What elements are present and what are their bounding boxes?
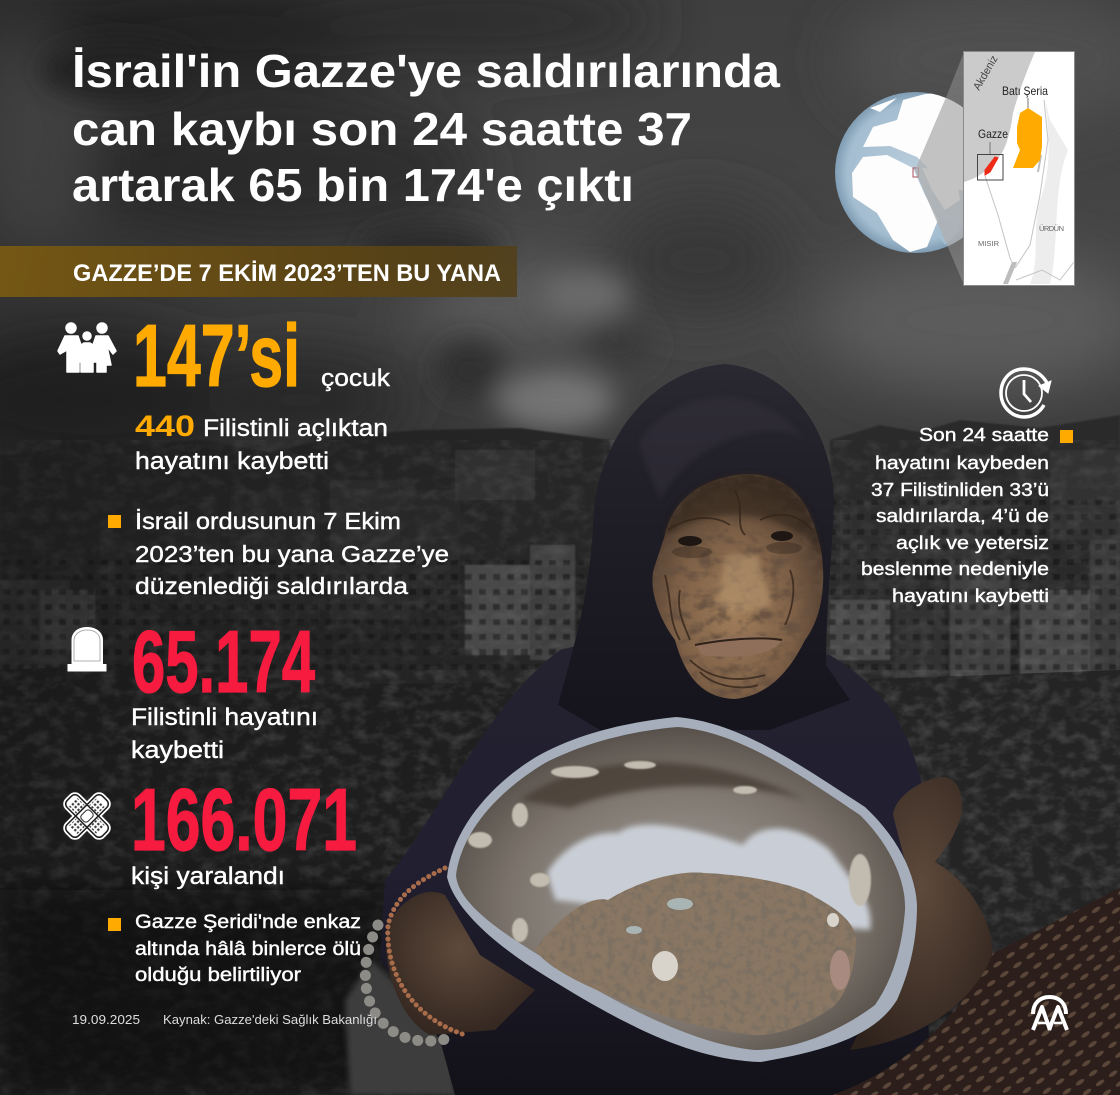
pink fragment	[830, 950, 850, 990]
logo: AA	[1033, 997, 1067, 1030]
icon: gravestone	[68, 627, 106, 672]
bowl	[447, 717, 917, 1062]
map panel	[964, 52, 1074, 286]
woman holding an empty bowl	[380, 364, 930, 1095]
stat: hunger deaths: 440	[135, 410, 195, 443]
text: last 24 hours: açlık ve yetersiz	[896, 532, 1049, 553]
title	[72, 45, 780, 211]
stat: children: 147’si	[133, 306, 300, 405]
text: under the rubble: altında hâlâ binlerce ölü	[135, 939, 361, 960]
title: İsrail'in Gazze'ye saldırılarında	[72, 45, 780, 97]
footer: date and source	[72, 1013, 377, 1027]
Gaza marker box	[978, 154, 1003, 180]
Gaza Strip	[985, 157, 998, 175]
banner	[0, 246, 517, 297]
text: under the rubble: Gazze Şeridi'nde enkaz	[135, 912, 361, 933]
stat: deaths: 65.174	[132, 612, 315, 711]
icon: clock with arrow	[1001, 369, 1051, 417]
terrain	[1030, 100, 1068, 284]
label: Gaza: Gazze	[978, 127, 1008, 141]
prayer beads	[365, 925, 450, 1041]
mouth	[695, 635, 782, 657]
text: attacks since 7 October: 2023’ten bu yana Gazze’ye	[135, 541, 449, 567]
map inset with globe	[835, 50, 1074, 290]
text: attacks since 7 October: İsrail ordusunun 7 Ekim	[135, 508, 401, 534]
foil and white residue	[547, 825, 871, 930]
text: attacks since 7 October	[108, 508, 449, 599]
text: under the rubble: olduğu belirtiliyor	[135, 965, 302, 986]
text: last 24 hours: saldırılarda, 4’ü de	[876, 505, 1049, 526]
hands and bowl	[365, 717, 992, 1062]
title: can kaybı son 24 saatte 37	[72, 103, 692, 155]
left hand	[386, 892, 535, 1035]
label: West Bank: Batı Şeria	[1002, 84, 1048, 98]
banner: GAZZE’DE 7 EKİM 2023’TEN BU YANA	[73, 260, 501, 287]
Gaza label leader	[989, 142, 991, 154]
face wrinkles	[652, 474, 823, 699]
stat: hunger deaths: hayatını kaybetti	[135, 448, 329, 475]
text: last 24 hours: hayatını kaybeden	[875, 452, 1049, 473]
text: under the rubble	[108, 912, 361, 986]
label: Egypt: MISIR	[978, 239, 1000, 248]
stat: wounded: 166.071	[131, 770, 357, 869]
stat: deaths: kaybetti	[131, 737, 224, 764]
stat: hunger deaths	[135, 410, 388, 475]
deep wrinkle lines	[665, 490, 812, 687]
face	[652, 474, 823, 699]
forehead shadow	[664, 474, 822, 556]
residue flecks	[468, 761, 871, 942]
stat: wounded	[131, 770, 357, 890]
text: last 24 hours: beslenme nedeniyle	[861, 558, 1049, 579]
text: attacks since 7 October: düzenlediği saldırılarda	[135, 573, 409, 599]
border lines	[985, 100, 1074, 280]
pale stones	[626, 898, 839, 981]
icon: bandage	[61, 790, 113, 842]
right hand	[850, 777, 992, 1050]
text: last 24 hours: hayatını kaybetti	[892, 585, 1049, 606]
stat: deaths	[131, 612, 318, 764]
label: Jordan: ÜRDÜN	[1039, 224, 1064, 233]
projection cone	[915, 55, 963, 282]
highlights on headscarf	[640, 397, 805, 500]
dead sea and gulf	[1003, 155, 1042, 284]
headscarf	[558, 364, 850, 730]
text: last 24 hours: 37 Filistinliden 33’ü	[871, 479, 1049, 500]
sea	[964, 52, 1035, 182]
grey patterned cloth bottom left	[345, 960, 455, 1095]
eyes	[672, 531, 802, 558]
title: artarak 65 bin 174'e çıktı	[72, 159, 634, 211]
text: last 24 hours	[861, 424, 1073, 606]
orange bead strand	[388, 868, 465, 1035]
bowl interior	[456, 727, 905, 1050]
food scraps	[535, 872, 856, 1035]
footer: date and source: Kaynak: Gazze'deki Sağlık Bakanlığı	[163, 1013, 377, 1027]
stat: children: çocuk	[321, 365, 391, 392]
nose	[717, 555, 770, 611]
globe	[835, 92, 963, 253]
West Bank	[1013, 108, 1042, 168]
stat: wounded: kişi yaralandı	[131, 863, 285, 890]
location marker on globe	[913, 168, 918, 177]
footer: date and source: 19.09.2025	[72, 1013, 140, 1027]
label: sea: Akdeniz	[971, 54, 1001, 92]
stat: hunger deaths: Filistinli açlıktan	[203, 415, 388, 442]
text: last 24 hours: Son 24 saatte	[919, 424, 1049, 445]
West Bank label leader	[1027, 98, 1029, 120]
body and shoulders	[380, 640, 930, 1095]
icon: family	[58, 323, 116, 372]
stat: deaths: Filistinli hayatını	[131, 704, 318, 731]
dark metal reflection	[520, 762, 805, 808]
patterned sleeve bottom right	[833, 888, 1120, 1095]
